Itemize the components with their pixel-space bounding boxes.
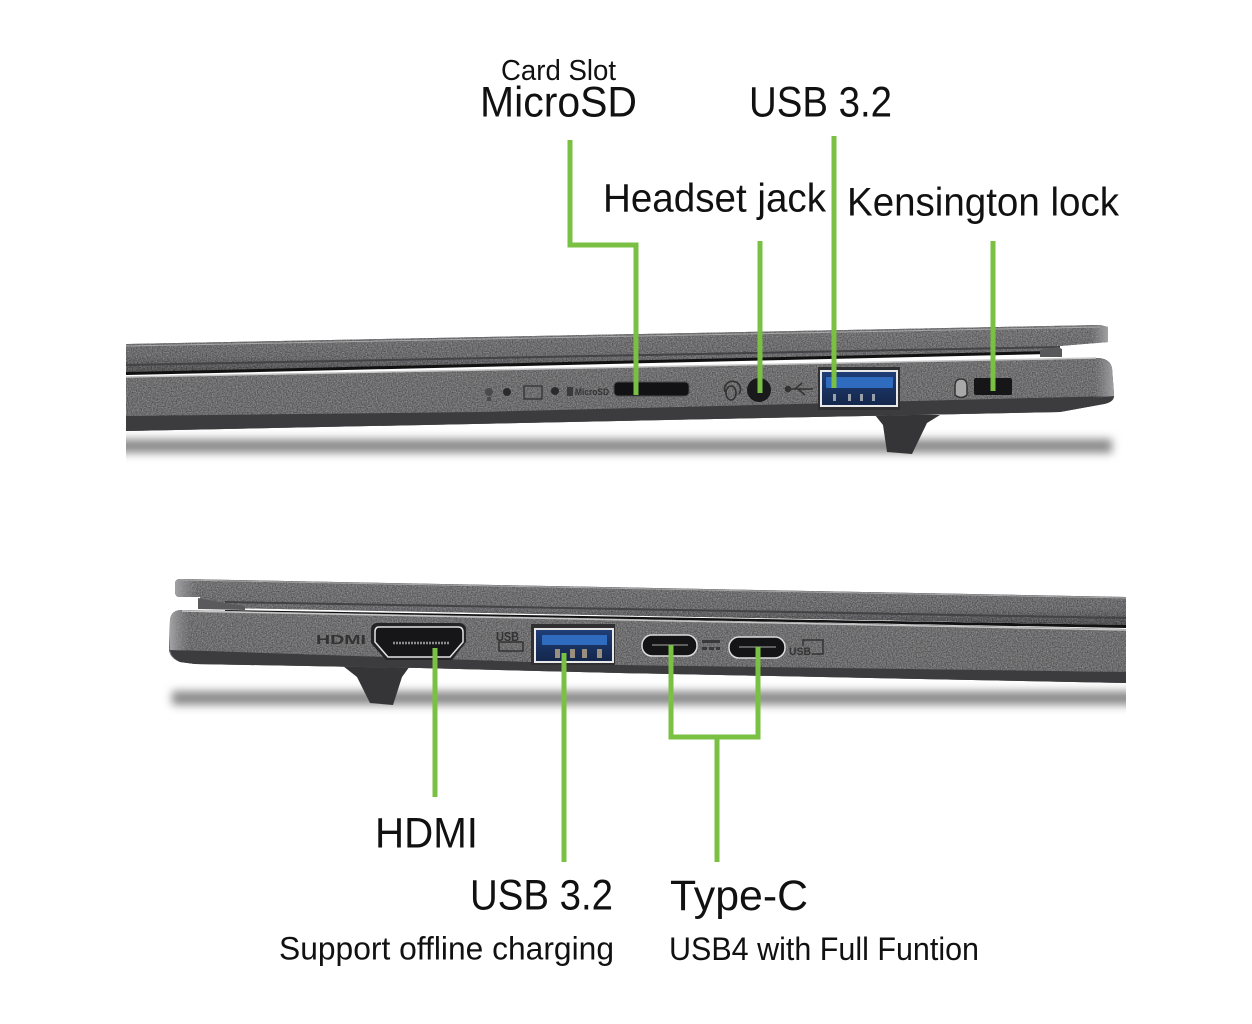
infographic: laptop ports diagram bbox=[126, 59, 1126, 966]
label: HDMI: HDMI bbox=[375, 810, 478, 858]
connector: USB 3.2 bottom bbox=[562, 653, 566, 862]
connector: HDMI bbox=[432, 648, 438, 797]
connector: USB 3.2 top bbox=[832, 136, 836, 388]
label: USB 3.2 top: USB 3.2 bbox=[749, 78, 892, 126]
connector: Type-C bbox=[671, 645, 758, 862]
port: headset jack bbox=[747, 378, 771, 402]
label: MicroSD: MicroSD bbox=[480, 78, 637, 126]
foot: left side view bbox=[343, 666, 410, 705]
HDMI marking: HDMI bbox=[316, 632, 366, 647]
icon: power marking bbox=[702, 640, 720, 650]
connector lines: top bbox=[570, 136, 993, 395]
label: Support offline charging: Support offline charging bbox=[279, 930, 614, 966]
connector lines: bottom bbox=[435, 645, 758, 862]
laptop: left side view bbox=[169, 579, 1172, 705]
label: Headset jack: Headset jack bbox=[603, 176, 827, 220]
status icons and MicroSD marking: MicroSD bbox=[575, 387, 609, 397]
foot: right side view bbox=[875, 415, 940, 454]
port: USB 3.2 left side bbox=[531, 624, 615, 665]
USB marking with charge icon bbox=[496, 629, 523, 651]
icon: USB display marking bbox=[789, 640, 823, 658]
port: Kensington lock bbox=[974, 378, 1012, 395]
port: USB 3.2 right side bbox=[818, 367, 900, 410]
port: Type-C 2 bbox=[729, 637, 785, 658]
icon: USB display marking: USB bbox=[789, 646, 811, 658]
connector: MicroSD bbox=[570, 140, 636, 395]
shadow: left side view bbox=[172, 691, 1172, 705]
port: HDMI bbox=[371, 623, 466, 660]
label: Kensington lock: Kensington lock bbox=[847, 180, 1120, 224]
port: Type-C 1 bbox=[642, 635, 697, 656]
label: Type-C: Type-C bbox=[670, 872, 808, 920]
laptop: right side view bbox=[110, 325, 1114, 454]
lid: left side view bbox=[169, 579, 1126, 683]
icon: lock bbox=[955, 379, 967, 398]
shadow: right side view bbox=[110, 439, 1112, 453]
label: Card Slot: Card Slot bbox=[501, 55, 616, 87]
connector: headset jack bbox=[758, 241, 762, 393]
body: left side view bbox=[169, 610, 1126, 683]
label: USB 3.2 bottom: USB 3.2 bbox=[470, 872, 613, 920]
body: right side view bbox=[126, 358, 1114, 431]
icon: USB trident bbox=[786, 383, 813, 395]
icon: headset bbox=[725, 381, 741, 400]
status icons and MicroSD marking bbox=[485, 386, 609, 401]
lid: right side view bbox=[126, 325, 1114, 431]
USB marking with charge icon: USB bbox=[496, 629, 519, 644]
label: USB4 with Full Funtion: USB4 with Full Funtion bbox=[669, 931, 979, 967]
port: MicroSD card slot bbox=[614, 382, 689, 396]
connector: Kensington lock bbox=[990, 241, 996, 391]
